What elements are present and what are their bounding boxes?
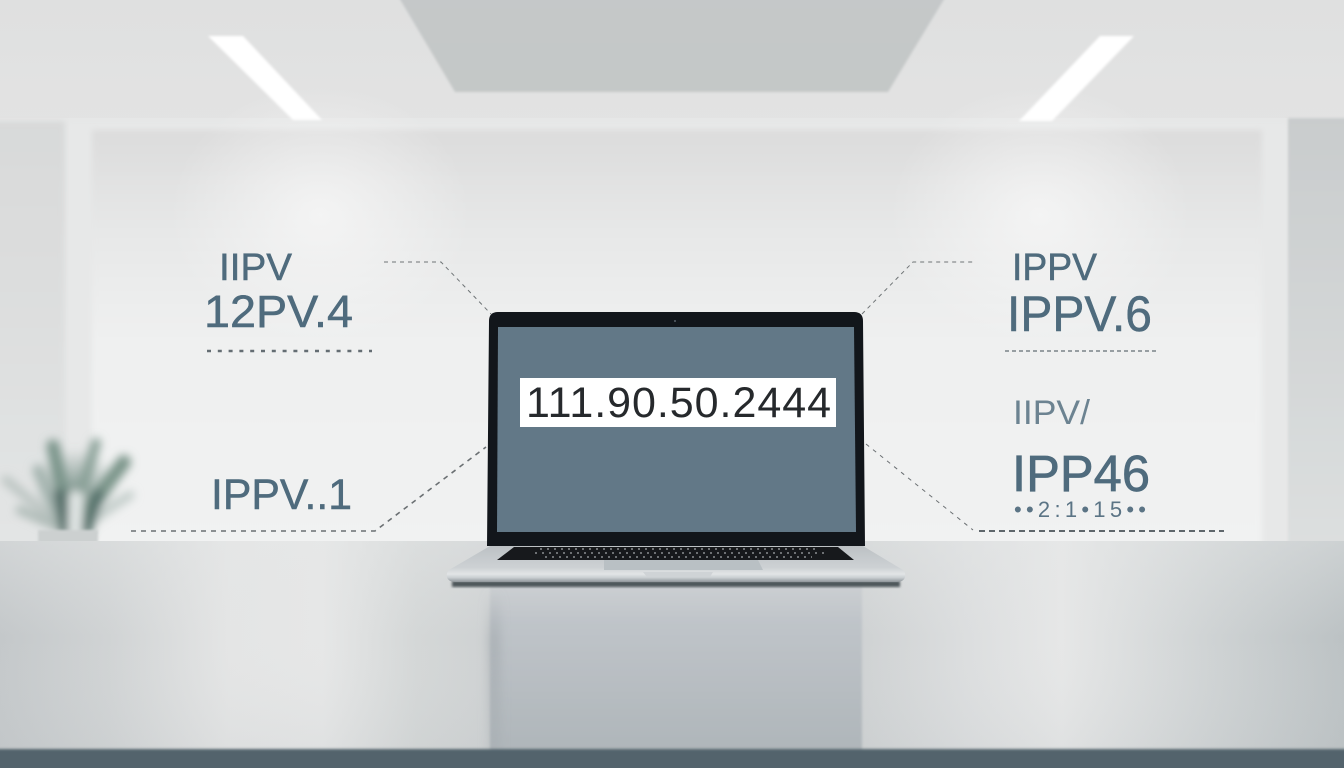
label group: top left	[204, 247, 372, 351]
keyboard keys	[535, 549, 825, 557]
plant	[6, 443, 130, 532]
label: 12PV.4: 12PV.4	[204, 286, 353, 337]
label: IIPV/: IIPV/	[1013, 394, 1091, 432]
plant pot	[38, 530, 98, 543]
connector: top left	[384, 262, 491, 314]
camera	[674, 320, 676, 322]
address bar	[520, 378, 836, 427]
laptop base	[447, 546, 905, 582]
connector: top right	[862, 262, 974, 314]
IP address text: 111.90.50.2444	[526, 379, 831, 427]
laptop reflection	[490, 575, 862, 765]
ceiling panel	[398, 0, 946, 92]
divider: top right	[1005, 350, 1157, 352]
label: 2:1 15: ••2:1•15••	[1014, 497, 1146, 522]
trackpad	[604, 560, 763, 570]
connector: bottom right	[866, 444, 973, 530]
ceiling light right	[1019, 36, 1134, 121]
label group: top right	[1005, 247, 1157, 351]
table surface	[0, 541, 1344, 765]
screen	[497, 327, 856, 532]
keyboard	[497, 547, 854, 560]
laptop lid	[487, 312, 865, 546]
label: IPP46: IPP46	[1012, 445, 1150, 502]
label: IPPV..1: IPPV..1	[211, 471, 352, 519]
laptop	[447, 312, 905, 587]
laptop shadow	[452, 581, 900, 587]
room background	[0, 0, 1344, 551]
bottom band	[0, 749, 1344, 768]
label: IPPV.6: IPPV.6	[1007, 286, 1152, 342]
divider: bottom right	[979, 530, 1224, 532]
label: IPPV: IPPV	[1012, 247, 1098, 289]
label group: bottom right	[1012, 394, 1150, 522]
reflection edge shadow	[488, 590, 500, 755]
divider: top left	[207, 350, 372, 352]
connector: bottom left	[131, 447, 486, 531]
trackpad notch	[643, 572, 713, 577]
ceiling light left	[208, 36, 322, 120]
label: IIPV: IIPV	[219, 247, 293, 289]
